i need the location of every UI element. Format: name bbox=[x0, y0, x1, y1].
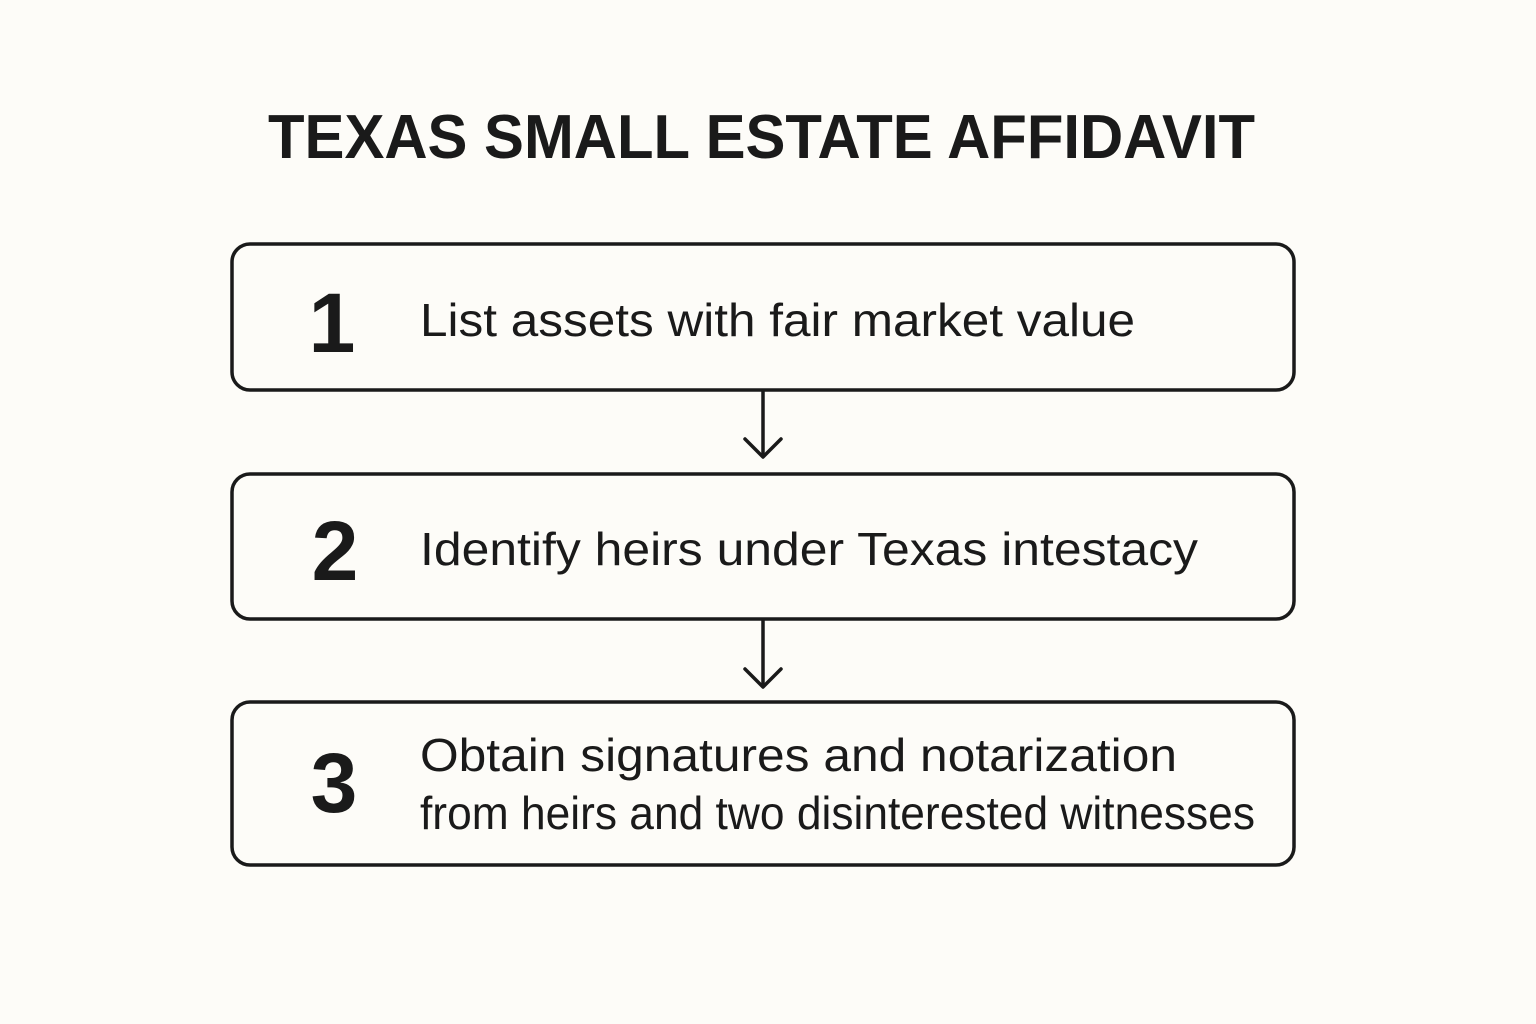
panel: step 3 bbox=[232, 702, 1294, 865]
step 3 number: 3 bbox=[311, 736, 357, 830]
step 2 number: 2 bbox=[312, 504, 358, 598]
step 2 text: Identify heirs under Texas intestacy bbox=[420, 523, 1198, 575]
step 3 text bbox=[420, 729, 1255, 839]
step 3 text: Obtain signatures and notarization bbox=[420, 729, 1177, 781]
panel: step 1 bbox=[232, 244, 1294, 390]
panel: step 2 bbox=[232, 474, 1294, 619]
step 1 number: 1 bbox=[309, 276, 355, 370]
step 1 text: List assets with fair market value bbox=[420, 294, 1135, 346]
title: TEXAS SMALL ESTATE AFFIDAVIT bbox=[268, 103, 1255, 172]
arrow 2 bbox=[745, 620, 781, 687]
step 3 text: from heirs and two disinterested witnesses bbox=[420, 787, 1255, 839]
arrow 1 bbox=[745, 391, 781, 457]
